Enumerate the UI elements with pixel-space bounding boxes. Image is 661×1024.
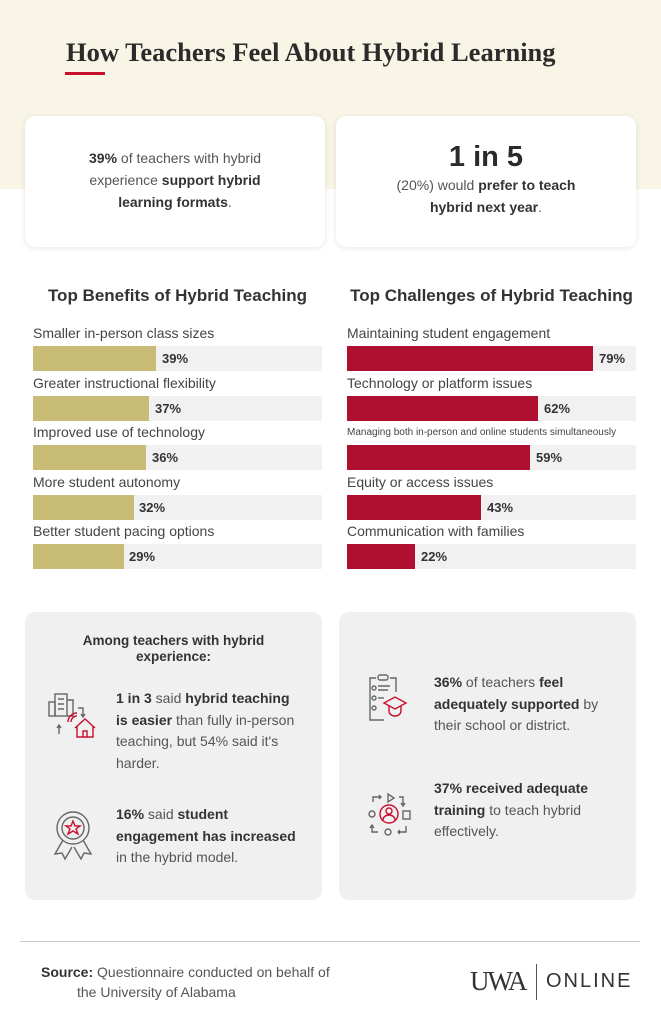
text: 36% supported: [434, 674, 598, 733]
logo: UWA Online: [470, 964, 632, 1000]
text: 1 in 3: teaching, but 54% said it's: [116, 733, 278, 749]
chart: challenges: Equity or access issues: [347, 474, 493, 490]
chart: benefits: 37%: [155, 401, 181, 416]
chart: challenges: 22%: [421, 549, 447, 564]
chart: challenges: Managing both in-person and online students simultaneously: [347, 427, 616, 438]
icon: clipboard with cap: [369, 674, 408, 721]
chart: challenges: Communication with families: [347, 523, 524, 539]
text: 1 in 3: 1 in 3 said hybrid teaching: [116, 690, 290, 706]
chart: benefits: Greater instructional flexibility: [33, 375, 216, 391]
chart: benefits: 36%: [152, 450, 178, 465]
panel: support and training: [339, 612, 636, 900]
card: 39% support: 39% of teachers with hybrid: [89, 150, 261, 166]
chart: challenges: [347, 325, 636, 569]
card: 1 in 5: (20%) would prefer to teach: [397, 177, 575, 193]
chart: benefits: 29%: [129, 549, 155, 564]
chart: challenges: 43%: [487, 500, 513, 515]
panel heading: [83, 633, 264, 664]
chart: benefits: Smaller in-person class sizes: [33, 325, 214, 341]
chart: benefits: More student autonomy: [33, 474, 180, 490]
source text: [41, 964, 330, 1000]
chart: challenges: Maintaining student engagement: [347, 325, 550, 341]
heading: benefits: Top Benefits of Hybrid Teaching: [48, 286, 307, 305]
text: 16%: engagement has increased: [116, 828, 296, 844]
icon: award ribbon: [54, 811, 92, 860]
title underline: [65, 72, 105, 75]
chart: benefits: Better student pacing options: [33, 523, 214, 539]
panel: among teachers: [25, 612, 322, 900]
text: 37% training: effectively.: [434, 823, 499, 839]
source text: the University of Alabama: [77, 984, 236, 1000]
chart: challenges: 59%: [536, 450, 562, 465]
text: 1 in 3: [116, 690, 294, 770]
text: 16%: 16% said student: [116, 806, 228, 822]
chart: benefits: Improved use of technology: [33, 424, 205, 440]
beige header background: [0, 0, 661, 189]
text: 1 in 3: is easier than fully in-person: [116, 712, 294, 728]
text: 36% supported: adequately supported by: [434, 696, 598, 712]
card: 1 in 5: 1 in 5: [449, 141, 523, 173]
text: 37% training: training to teach hybrid: [434, 802, 581, 818]
chart: benefits: 39%: [162, 351, 188, 366]
logo: UWA Online: ONLINE: [546, 970, 632, 992]
logo: UWA Online: UWA: [470, 966, 526, 996]
chart: benefits: 32%: [139, 500, 165, 515]
card: 39% support: experience support hybrid: [89, 172, 261, 188]
panel heading: Among teachers with hybrid: [83, 633, 264, 648]
chart: challenges: 62%: [544, 401, 570, 416]
icon: building to home: [48, 693, 96, 738]
text: 16%: [116, 806, 296, 865]
card: 39% support: [25, 116, 325, 247]
title: How Teachers Feel About Hybrid Learning: [66, 37, 556, 67]
source text: Source: Questionnaire conducted on behalf of: [41, 964, 330, 980]
text: 16%: in the hybrid model.: [116, 849, 238, 865]
text: 37% training: 37% received adequate: [434, 780, 588, 796]
card: 1 in 5: [336, 116, 636, 247]
icon: training cycle: [368, 792, 411, 836]
chart: benefits: [33, 325, 322, 569]
text: 36% supported: 36% of teachers feel: [434, 674, 563, 690]
text: 36% supported: their school or district.: [434, 717, 570, 733]
divider: [20, 941, 640, 942]
chart: challenges: 79%: [599, 351, 625, 366]
panel heading: experience:: [136, 649, 211, 664]
text: 1 in 3: harder.: [116, 754, 160, 770]
heading: challenges: Top Challenges of Hybrid Teaching: [350, 286, 633, 305]
text: 37% training: [434, 780, 588, 839]
card: 1 in 5: hybrid next year.: [430, 199, 542, 215]
chart: challenges: Technology or platform issues: [347, 375, 532, 391]
card: 39% support: learning formats.: [118, 194, 232, 210]
